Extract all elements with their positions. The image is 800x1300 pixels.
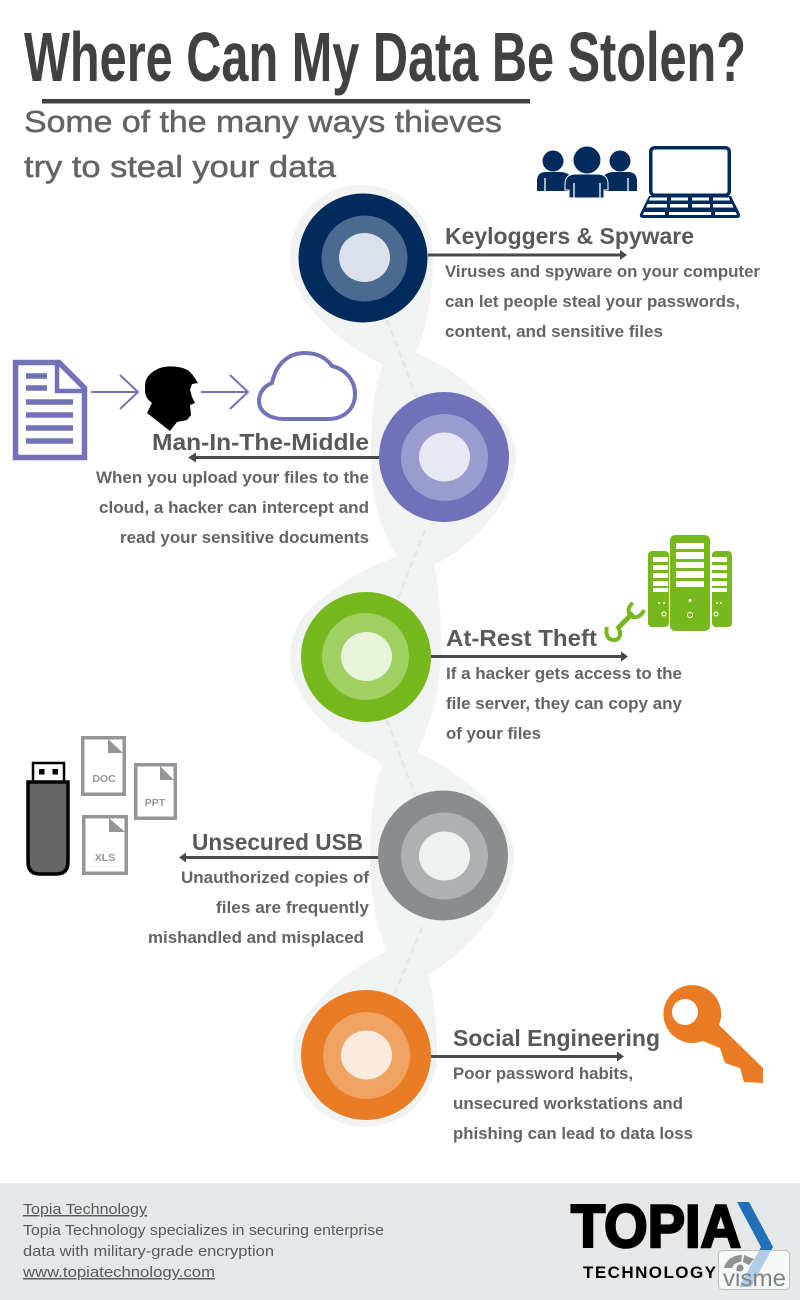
description [96, 469, 369, 547]
node circle [379, 392, 509, 522]
badge: visme: visme [723, 1265, 786, 1291]
heading: Keyloggers & Spyware [445, 223, 694, 249]
winding background path [290, 185, 516, 1127]
title underline [42, 99, 530, 104]
arrow [431, 652, 628, 662]
footer text: Topia Technology [23, 1202, 148, 1218]
description [148, 869, 370, 947]
description: Viruses and spyware on your computer [445, 263, 761, 281]
icon: wrench [606, 603, 644, 640]
description: When you upload your files to the [96, 469, 369, 487]
icon: ppt file [136, 765, 175, 818]
description: Poor password habits, [453, 1065, 633, 1083]
node circle [301, 592, 431, 722]
subtitle: Some of the many ways thieves [24, 104, 502, 139]
heading: Man-In-The-Middle [152, 429, 369, 455]
arrow [431, 1052, 624, 1062]
heading: At-Rest Theft [446, 625, 597, 651]
description: If a hacker gets access to the [446, 665, 682, 683]
description [446, 665, 683, 743]
section: man in the middle [96, 392, 509, 547]
footer text: www.topiatechnology.com [22, 1265, 215, 1281]
icon: people [537, 146, 637, 199]
description: cloud, a hacker can intercept and [99, 499, 369, 517]
logo: topia technology: TOPIA [571, 1193, 741, 1260]
icon: document [16, 362, 85, 458]
icon: ppt file: PPT [145, 797, 166, 809]
icon: laptop [640, 148, 740, 218]
arrow [428, 250, 627, 260]
description [453, 1065, 693, 1143]
icon: cloud [259, 353, 355, 419]
description: mishandled and misplaced [148, 929, 364, 947]
badge: visme [718, 1250, 790, 1291]
icon: xls file: XLS [95, 852, 115, 864]
node circle [378, 790, 508, 920]
description: read your sensitive documents [120, 529, 369, 547]
description: content, and sensitive files [445, 323, 663, 341]
icon: servers [648, 535, 732, 631]
icon: hacker head [145, 366, 198, 431]
description [445, 263, 761, 341]
description: of your files [446, 725, 541, 743]
node circle [298, 194, 428, 322]
logo: topia technology [571, 1193, 773, 1287]
description: Unauthorized copies of [181, 869, 370, 887]
description: unsecured workstations and [453, 1095, 683, 1113]
arrow: hacker to cloud [201, 375, 248, 409]
footer text [22, 1202, 384, 1281]
description: can let people steal your passwords, [445, 293, 740, 311]
section: at-rest theft [301, 592, 683, 743]
section: social engineering [301, 990, 693, 1143]
description: file server, they can copy any [446, 695, 683, 713]
icon: key [663, 985, 763, 1083]
description: phishing can lead to data loss [453, 1125, 693, 1143]
logo: topia technology: TECHNOLOGY [583, 1263, 717, 1282]
arrow [179, 852, 379, 862]
arrow [188, 452, 380, 462]
node circle [301, 990, 431, 1120]
footer text: data with military-grade encryption [23, 1244, 274, 1260]
footer text: Topia Technology specializes in securing enterprise [23, 1223, 384, 1239]
footer band [0, 1183, 800, 1300]
dashed connectors [387, 320, 425, 993]
icon: usb drive [28, 763, 68, 874]
description: files are frequently [216, 899, 370, 917]
heading: Social Engineering [453, 1025, 660, 1051]
heading: Unsecured USB [192, 829, 363, 855]
arrow: document to hacker [91, 375, 138, 409]
section: unsecured usb [148, 790, 508, 947]
icon: xls file [84, 817, 126, 873]
icon: doc file: DOC [92, 773, 116, 785]
icon: doc file [83, 738, 124, 794]
subtitle: try to steal your data [24, 149, 337, 184]
section: keyloggers [298, 194, 761, 341]
subtitle [24, 104, 502, 184]
